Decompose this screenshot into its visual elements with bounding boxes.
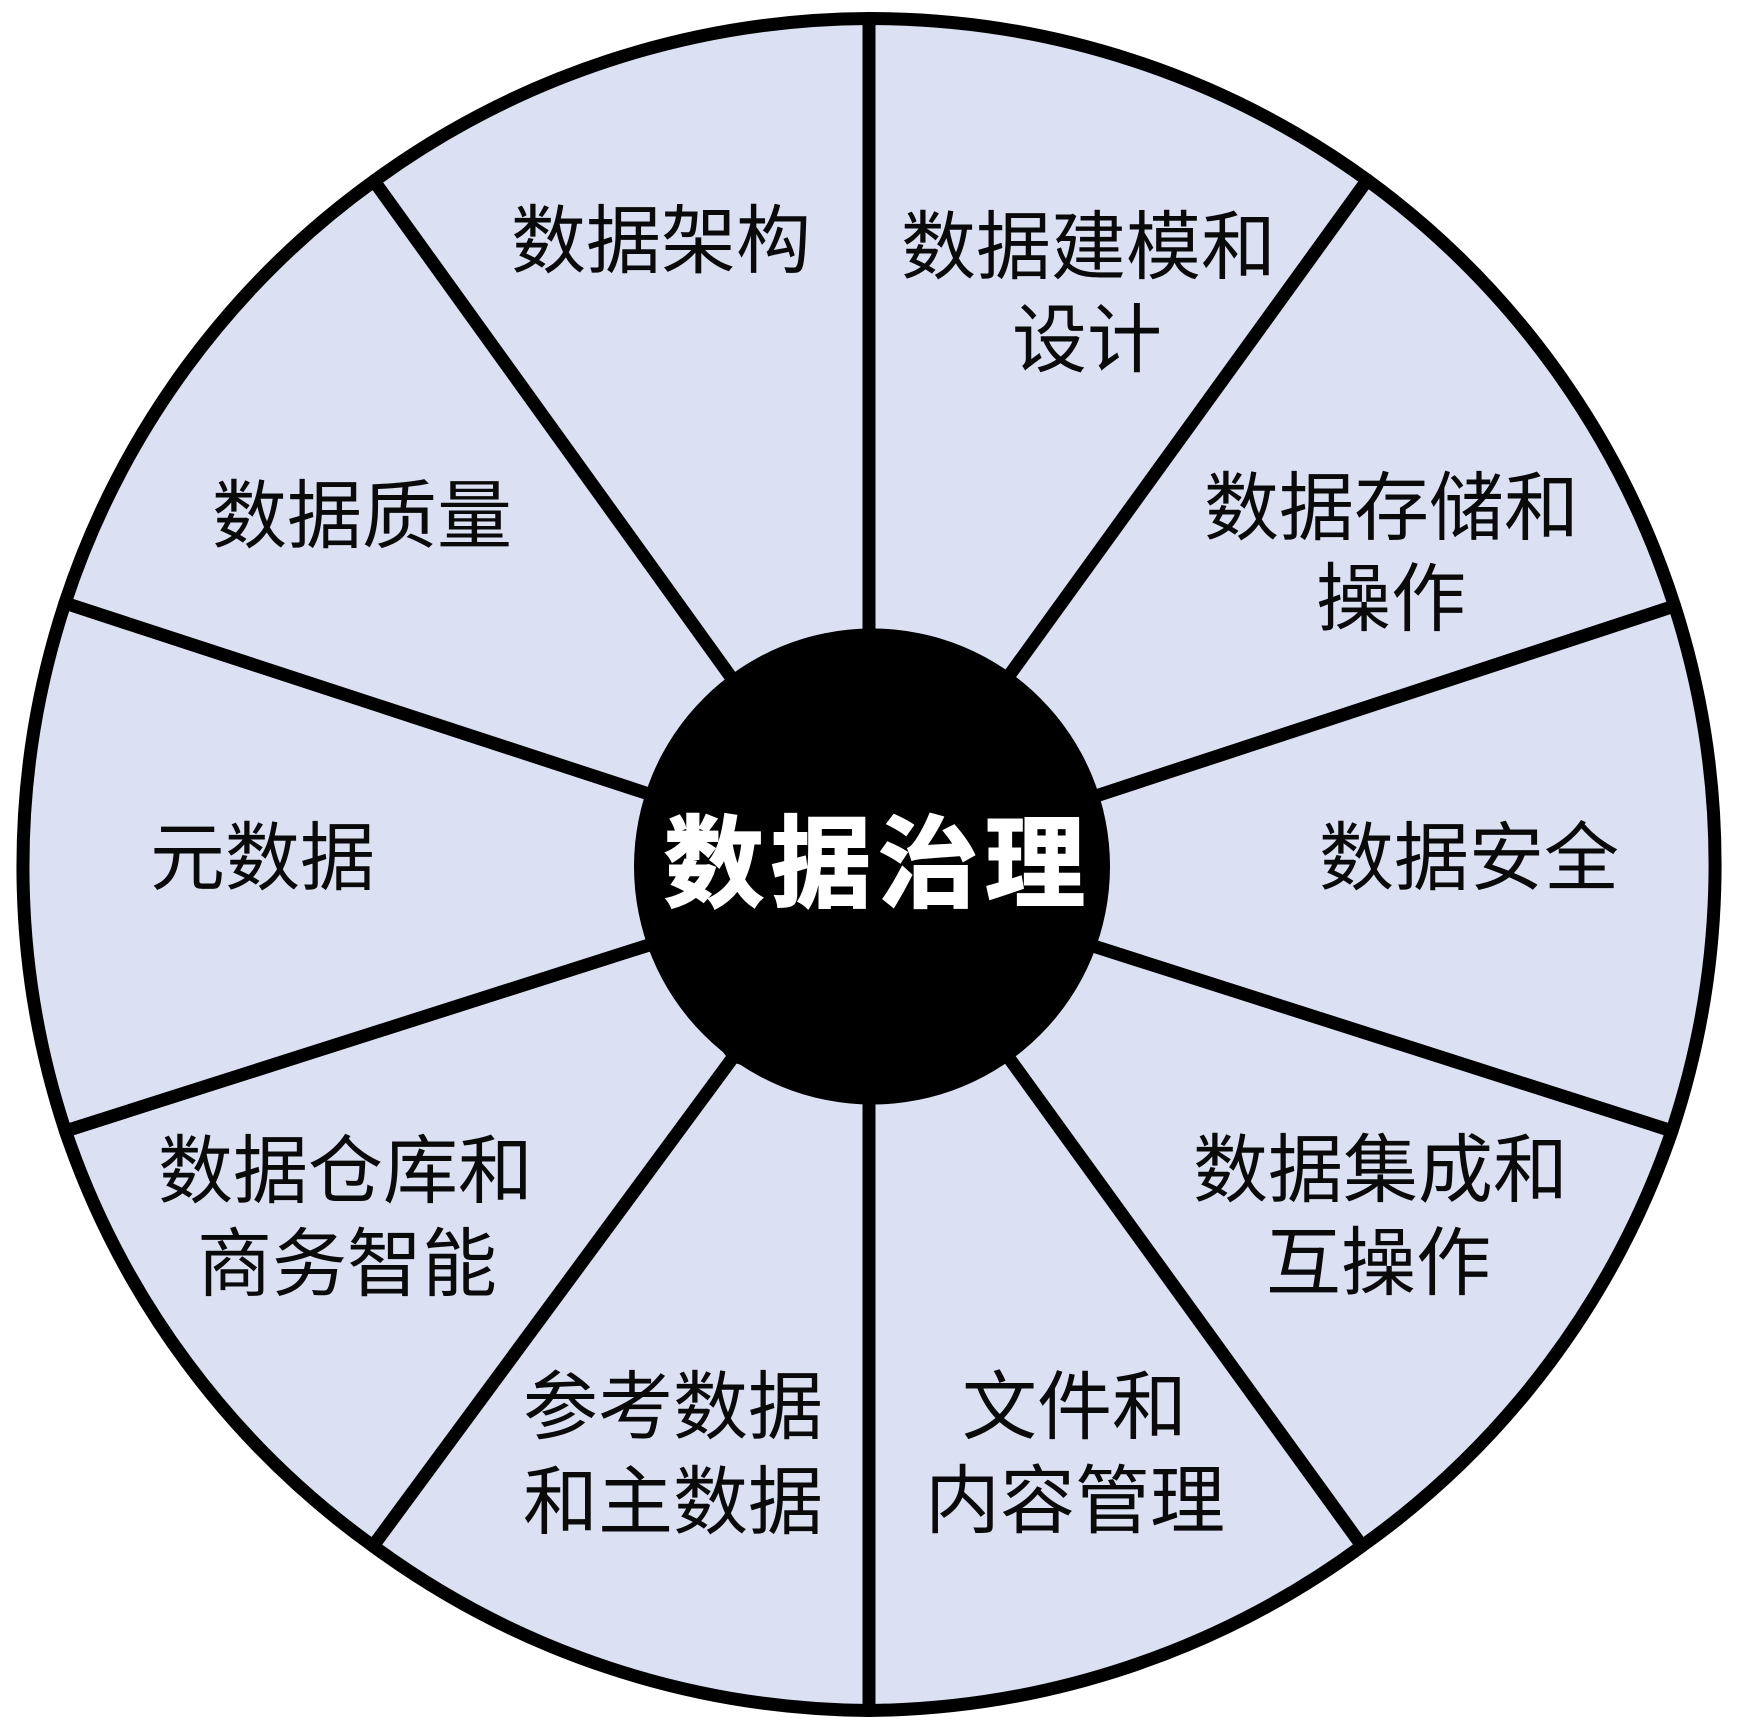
segment: metadata <box>23 603 652 1131</box>
segment: reference and master data: 和主数据 <box>523 1460 823 1544</box>
segment: data architecture <box>374 18 869 680</box>
segment: data integration and interoperability: 数据集成和 <box>1193 1128 1568 1212</box>
segment: data quality <box>65 181 733 795</box>
segment: data integration and interoperability <box>1006 945 1672 1546</box>
segment: data warehousing and business intelligence: 数据仓库和 <box>158 1129 533 1213</box>
segment: data modeling and design: 数据建模和 <box>901 205 1276 289</box>
segment: data warehousing and business intelligence <box>65 944 734 1546</box>
segment: data security: 数据安全 <box>1319 816 1619 900</box>
segment: data storage and operations: 操作 <box>1316 557 1466 641</box>
segment: reference and master data <box>373 1056 869 1710</box>
segment: data storage and operations: 数据存储和 <box>1204 466 1579 550</box>
segment: document and content management: 内容管理 <box>925 1459 1225 1543</box>
segment: document and content management <box>869 1054 1362 1710</box>
segment: data quality: 数据质量 <box>212 474 512 558</box>
center hub: data governance <box>634 628 1110 1104</box>
segment: data warehousing and business intelligence: 商务智能 <box>197 1222 497 1306</box>
segment: reference and master data: 参考数据 <box>523 1365 823 1449</box>
segment: data modeling and design: 设计 <box>1012 298 1162 382</box>
segment: document and content management: 文件和 <box>962 1365 1187 1449</box>
center hub: data governance: 数据治理 <box>664 809 1092 921</box>
segment: data integration and interoperability: 互操作 <box>1266 1221 1491 1305</box>
segment: data storage and operations <box>1006 180 1675 798</box>
segment: data architecture: 数据架构 <box>511 199 811 283</box>
segment: data security <box>1090 606 1715 1131</box>
segment: metadata: 元数据 <box>150 816 375 900</box>
segment: data modeling and design <box>869 18 1367 680</box>
